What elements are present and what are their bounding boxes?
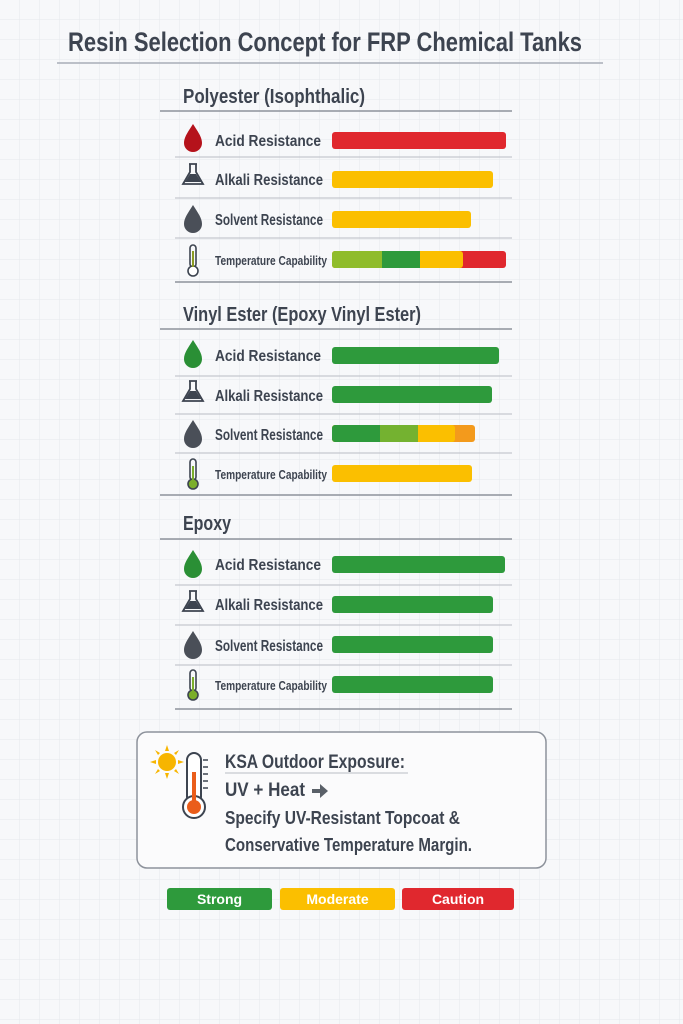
- bar: temperature: [332, 465, 472, 482]
- legend: Strong: [197, 891, 242, 907]
- panel: polyester: Acid Resistance: [215, 133, 321, 150]
- panel: polyester: [160, 86, 512, 282]
- bar: alkali: [332, 171, 493, 188]
- icon: sun: [150, 745, 184, 779]
- panel: epoxy: Temperature Capability: [215, 678, 328, 693]
- callout: KSA outdoor exposure: Conservative Temperature Margin.: [225, 835, 472, 855]
- panel: epoxy: [160, 513, 512, 709]
- icon: solvent drop: [184, 631, 202, 659]
- heading: vinyl ester: Vinyl Ester (Epoxy Vinyl Ester): [183, 304, 421, 326]
- bar: acid: [332, 556, 505, 573]
- icon: flask: [183, 164, 203, 184]
- icon: thermometer: [183, 753, 208, 818]
- icon: acid drop red: [184, 124, 202, 152]
- callout: KSA outdoor exposure: Specify UV-Resistant Topcoat &: [225, 808, 460, 828]
- arrow: [312, 784, 328, 798]
- heading: polyester: Polyester (Isophthalic): [183, 86, 365, 108]
- legend: Caution: [432, 891, 484, 907]
- bar: solvent: [332, 636, 493, 653]
- icon: acid drop green: [184, 550, 202, 578]
- icon: thermometer: [188, 670, 198, 700]
- panel: epoxy: Acid Resistance: [215, 557, 321, 574]
- title: Resin Selection Concept for FRP Chemical Tanks: [68, 27, 582, 57]
- bar: acid: [332, 132, 506, 149]
- bar: temperature: [332, 676, 493, 693]
- panel: epoxy: Solvent Resistance: [215, 638, 323, 655]
- callout text: UV + Heat: [225, 780, 306, 801]
- panel: vinyl ester: Temperature Capability: [215, 467, 328, 482]
- heading: epoxy: Epoxy: [183, 513, 232, 535]
- callout: KSA outdoor exposure: [137, 732, 546, 868]
- panel: vinyl ester: [160, 304, 512, 495]
- panel: polyester: Alkali Resistance: [215, 172, 323, 189]
- panel: vinyl ester: Acid Resistance: [215, 348, 321, 365]
- bar: acid: [332, 347, 499, 364]
- callout heading: KSA Outdoor Exposure:: [225, 752, 405, 773]
- bar: solvent: [332, 211, 471, 228]
- bar: solvent: [332, 425, 475, 442]
- panel: polyester: Temperature Capability: [215, 253, 328, 268]
- panel: epoxy: Alkali Resistance: [215, 597, 323, 614]
- bar: temperature: [332, 251, 506, 268]
- bar: alkali: [332, 386, 492, 403]
- panel: vinyl ester: Solvent Resistance: [215, 427, 323, 444]
- panel: vinyl ester: Alkali Resistance: [215, 388, 323, 405]
- icon: flask: [183, 381, 203, 401]
- icon: solvent drop: [184, 420, 202, 448]
- icon: thermometer: [188, 459, 198, 489]
- bar: alkali: [332, 596, 493, 613]
- icon: acid drop green: [184, 340, 202, 368]
- icon: solvent drop: [184, 205, 202, 233]
- panel: polyester: Solvent Resistance: [215, 212, 323, 229]
- legend: Moderate: [306, 891, 369, 907]
- legend: [167, 888, 514, 910]
- icon: thermometer: [188, 245, 198, 276]
- icon: flask: [183, 591, 203, 611]
